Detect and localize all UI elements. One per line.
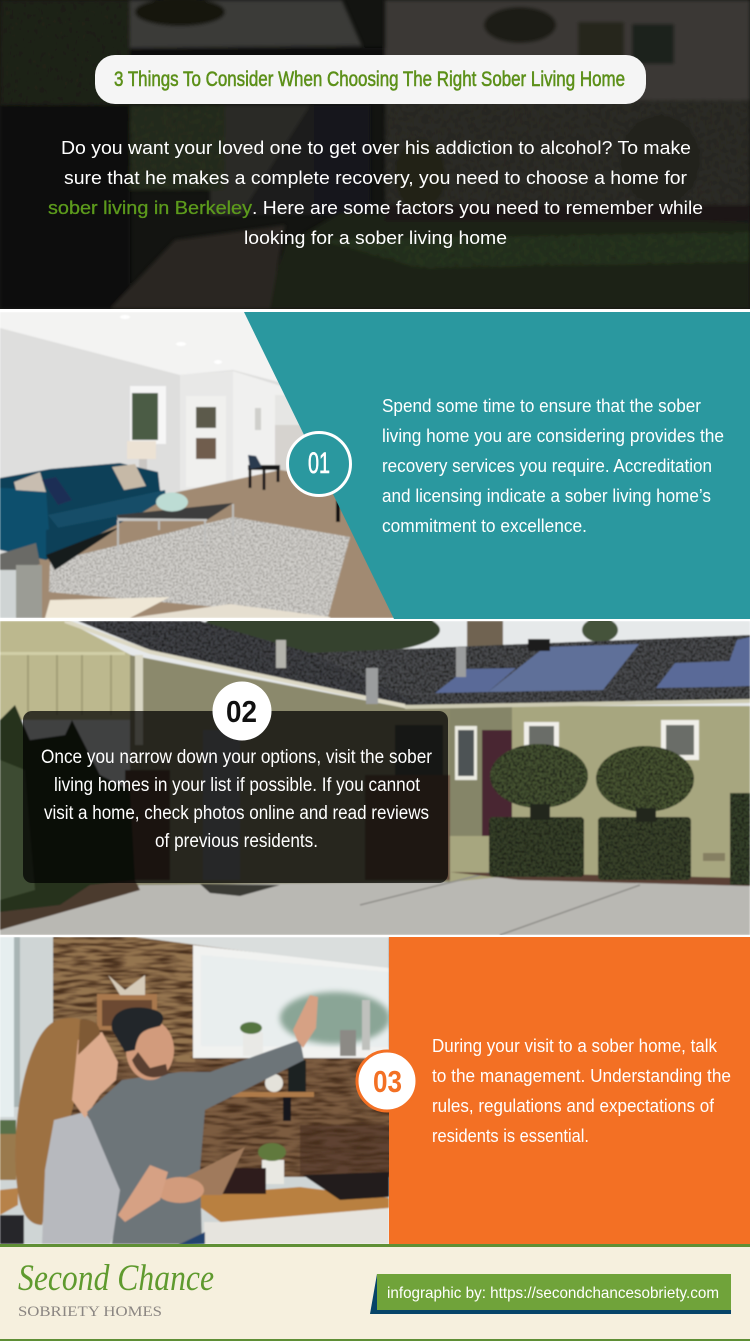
step 01 text: Spend some time to ensure that the sober <box>382 396 701 416</box>
step 02 text: living homes in your list if possible. If you cannot <box>54 775 421 796</box>
panel: step 02 <box>0 604 750 935</box>
step 01 text: commitment to excellence. <box>382 516 587 536</box>
credit banner: infographic by: https://secondchancesobriety.com <box>387 1285 719 1302</box>
orange panel <box>389 937 750 1244</box>
step 03 text: rules, regulations and expectations of <box>432 1096 715 1116</box>
panel: footer <box>0 1244 750 1341</box>
number badge 01: 01 <box>308 447 330 480</box>
step 03 text: to the management. Understanding the <box>432 1066 731 1086</box>
teal panel <box>244 312 750 619</box>
title pill: 3 Things To Consider When Choosing The Right Sober Living Home <box>114 68 625 91</box>
intro text: . Here are some factors you need to remember while <box>252 197 703 218</box>
intro text: sure that he makes a complete recovery, you need to choose a home for <box>64 167 687 188</box>
intro text: sober living in Berkeley <box>48 197 253 218</box>
step 03 text <box>432 1036 731 1146</box>
intro text: looking for a sober living home <box>244 227 507 248</box>
dark text box <box>23 711 448 883</box>
number badge 02: 02 <box>226 694 257 729</box>
panel: step 03 <box>0 937 750 1245</box>
number badge 01 <box>288 432 350 496</box>
step 01 text: living home you are considering provides the <box>382 426 724 446</box>
step 02 text <box>41 747 433 852</box>
step 01 text <box>382 396 724 536</box>
photo: living room <box>0 312 400 618</box>
step 02 text: Once you narrow down your options, visit the sober <box>41 747 433 768</box>
intro text: Do you want your loved one to get over his addiction to alcohol? To make <box>61 137 691 158</box>
step 02 text: of previous residents. <box>155 831 318 852</box>
logo: Second Chance Sobriety Homes: SOBRIETY HOMES <box>18 1304 162 1320</box>
step 01 text: recovery services you require. Accreditation <box>382 456 712 476</box>
photo: dark house exterior background <box>0 0 750 309</box>
photo: house with solar panels <box>0 604 750 935</box>
step 03 text: During your visit to a sober home, talk <box>432 1036 718 1056</box>
logo: Second Chance Sobriety Homes <box>18 1258 214 1320</box>
credit banner <box>370 1274 731 1314</box>
step 01 text: and licensing indicate a sober living home’s <box>382 486 711 506</box>
panel: step 01 <box>0 312 750 619</box>
photo: couple in kitchen <box>0 937 393 1245</box>
step 02 text: visit a home, check photos online and read reviews <box>44 803 429 824</box>
title pill <box>95 55 646 104</box>
logo: Second Chance Sobriety Homes: Second Chance <box>18 1258 214 1299</box>
panel: intro hero <box>0 0 750 309</box>
step 03 text: residents is essential. <box>432 1126 589 1146</box>
number badge 03 <box>357 1051 417 1111</box>
number badge 03: 03 <box>373 1064 402 1099</box>
intro text <box>48 137 703 248</box>
number badge 02 <box>212 682 272 740</box>
